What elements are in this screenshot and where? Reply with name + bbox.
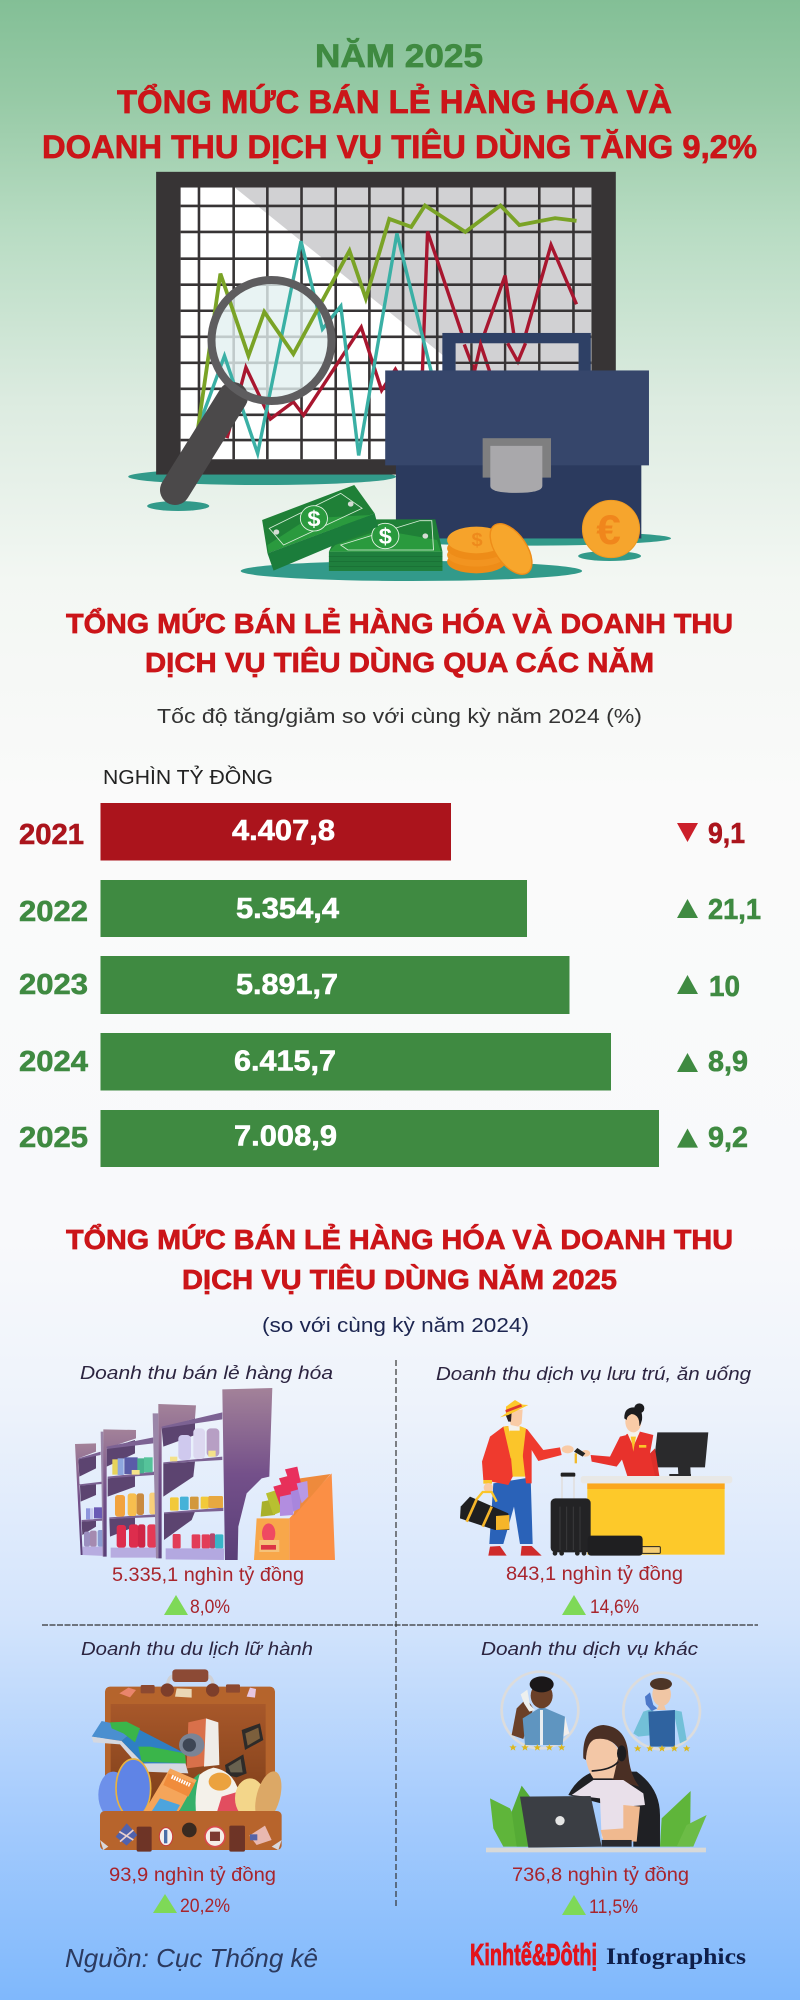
icon: hotel reception: [460, 1400, 732, 1556]
icon: open suitcase: [92, 1669, 286, 1852]
value: accommodation: 843,1 nghìn tỷ đồng: [506, 1564, 683, 1585]
growth: retail: 8,0%: [190, 1597, 230, 1618]
row 2021: [19, 803, 745, 860]
value: travel: 93,9 nghìn tỷ đồng: [109, 1865, 276, 1886]
row 2023: 2023: [19, 969, 88, 1001]
money stacks: [262, 485, 442, 571]
icon: customer support: [486, 1672, 707, 1852]
title: NĂM 2025: [315, 38, 483, 74]
illustration: chart, magnifier, briefcase and money: [128, 172, 671, 581]
row 2022: [19, 880, 761, 937]
bar chart: [19, 803, 761, 1167]
row 2025: 9,2: [708, 1122, 748, 1154]
row 2021: 4.407,8: [232, 815, 335, 847]
row 2022: 21,1: [708, 894, 761, 926]
row 2022: 2022: [19, 896, 88, 928]
row 2024: 2024: [19, 1046, 88, 1078]
subtitle: growth rate: Tốc độ tăng/giảm so với cùng kỳ năm 2024 (%): [157, 706, 642, 728]
row 2025: [19, 1110, 748, 1167]
growth: accommodation: [562, 1595, 639, 1618]
value: other services: 736,8 nghìn tỷ đồng: [512, 1865, 689, 1886]
coins: €: [596, 507, 621, 554]
row 2024: [19, 1033, 748, 1090]
subtitle: comparison: (so với cùng kỳ năm 2024): [262, 1315, 529, 1337]
row 2022: 5.354,4: [236, 893, 339, 925]
row 2021: 9,1: [708, 818, 745, 850]
growth: retail: [164, 1595, 230, 1618]
source: Nguồn: Cục Thống kê: [65, 1943, 318, 1973]
row 2025: 2025: [19, 1122, 88, 1154]
panel: other services: [481, 1639, 707, 1918]
row 2025: 7.008,9: [234, 1121, 337, 1153]
magnifier: [175, 280, 332, 490]
growth: travel: [153, 1894, 230, 1917]
unit label: NGHÌN TỶ ĐỒNG: [103, 765, 273, 789]
row 2021: 2021: [19, 819, 84, 851]
row 2023: 10: [709, 971, 740, 1003]
growth: accommodation: 14,6%: [590, 1597, 639, 1618]
heading: breakdown section: [66, 1223, 733, 1295]
icon: store shelves: [75, 1388, 335, 1560]
row 2023: 5.891,7: [236, 969, 338, 1001]
row 2024: 8,9: [708, 1046, 748, 1078]
monitor chart: [156, 172, 616, 475]
logo: Kinh tế & Đô thị Infographics: Infographics: [606, 1944, 746, 1969]
label: accommodation: Doanh thu dịch vụ lưu trú, ăn uống: [436, 1364, 751, 1384]
heading: bars section: DỊCH VỤ TIÊU DÙNG QUA CÁC NĂM: [145, 647, 654, 678]
growth: other services: 11,5%: [589, 1897, 638, 1918]
label: travel: Doanh thu du lịch lữ hành: [81, 1639, 313, 1659]
title: TỔNG MỨC BÁN LẺ HÀNG HÓA VÀ: [117, 84, 672, 120]
heading: bars section: [66, 607, 733, 678]
shadows under objects: [128, 468, 671, 581]
money stacks: $: [379, 524, 392, 549]
row 2023: [19, 956, 740, 1014]
title: [42, 38, 757, 165]
heading: breakdown section: TỔNG MỨC BÁN LẺ HÀNG HÓA VÀ DOANH THU: [66, 1223, 733, 1255]
heading: bars section: TỔNG MỨC BÁN LẺ HÀNG HÓA VÀ DOANH THU: [66, 607, 733, 639]
stars: [509, 1744, 690, 1752]
coins: [447, 500, 640, 581]
money stacks: $: [307, 506, 321, 531]
label: retail: Doanh thu bán lẻ hàng hóa: [80, 1363, 333, 1383]
panel: travel: [81, 1639, 313, 1917]
panel: retail: [75, 1363, 335, 1618]
label: other services: Doanh thu dịch vụ khác: [481, 1639, 698, 1659]
logo: Kinh tế & Đô thị Infographics: Kinhtế&Đôthị: [470, 1937, 597, 1972]
growth: other services: [562, 1895, 638, 1918]
row 2024: 6.415,7: [234, 1046, 336, 1078]
panel: accommodation and food: [436, 1364, 751, 1618]
growth: travel: 20,2%: [180, 1896, 230, 1917]
heading: breakdown section: DỊCH VỤ TIÊU DÙNG NĂM 2025: [182, 1264, 617, 1295]
briefcase: [385, 333, 649, 538]
coins: $: [472, 530, 483, 551]
value: retail: 5.335,1 nghìn tỷ đồng: [112, 1565, 304, 1586]
title: DOANH THU DỊCH VỤ TIÊU DÙNG TĂNG 9,2%: [42, 129, 757, 165]
